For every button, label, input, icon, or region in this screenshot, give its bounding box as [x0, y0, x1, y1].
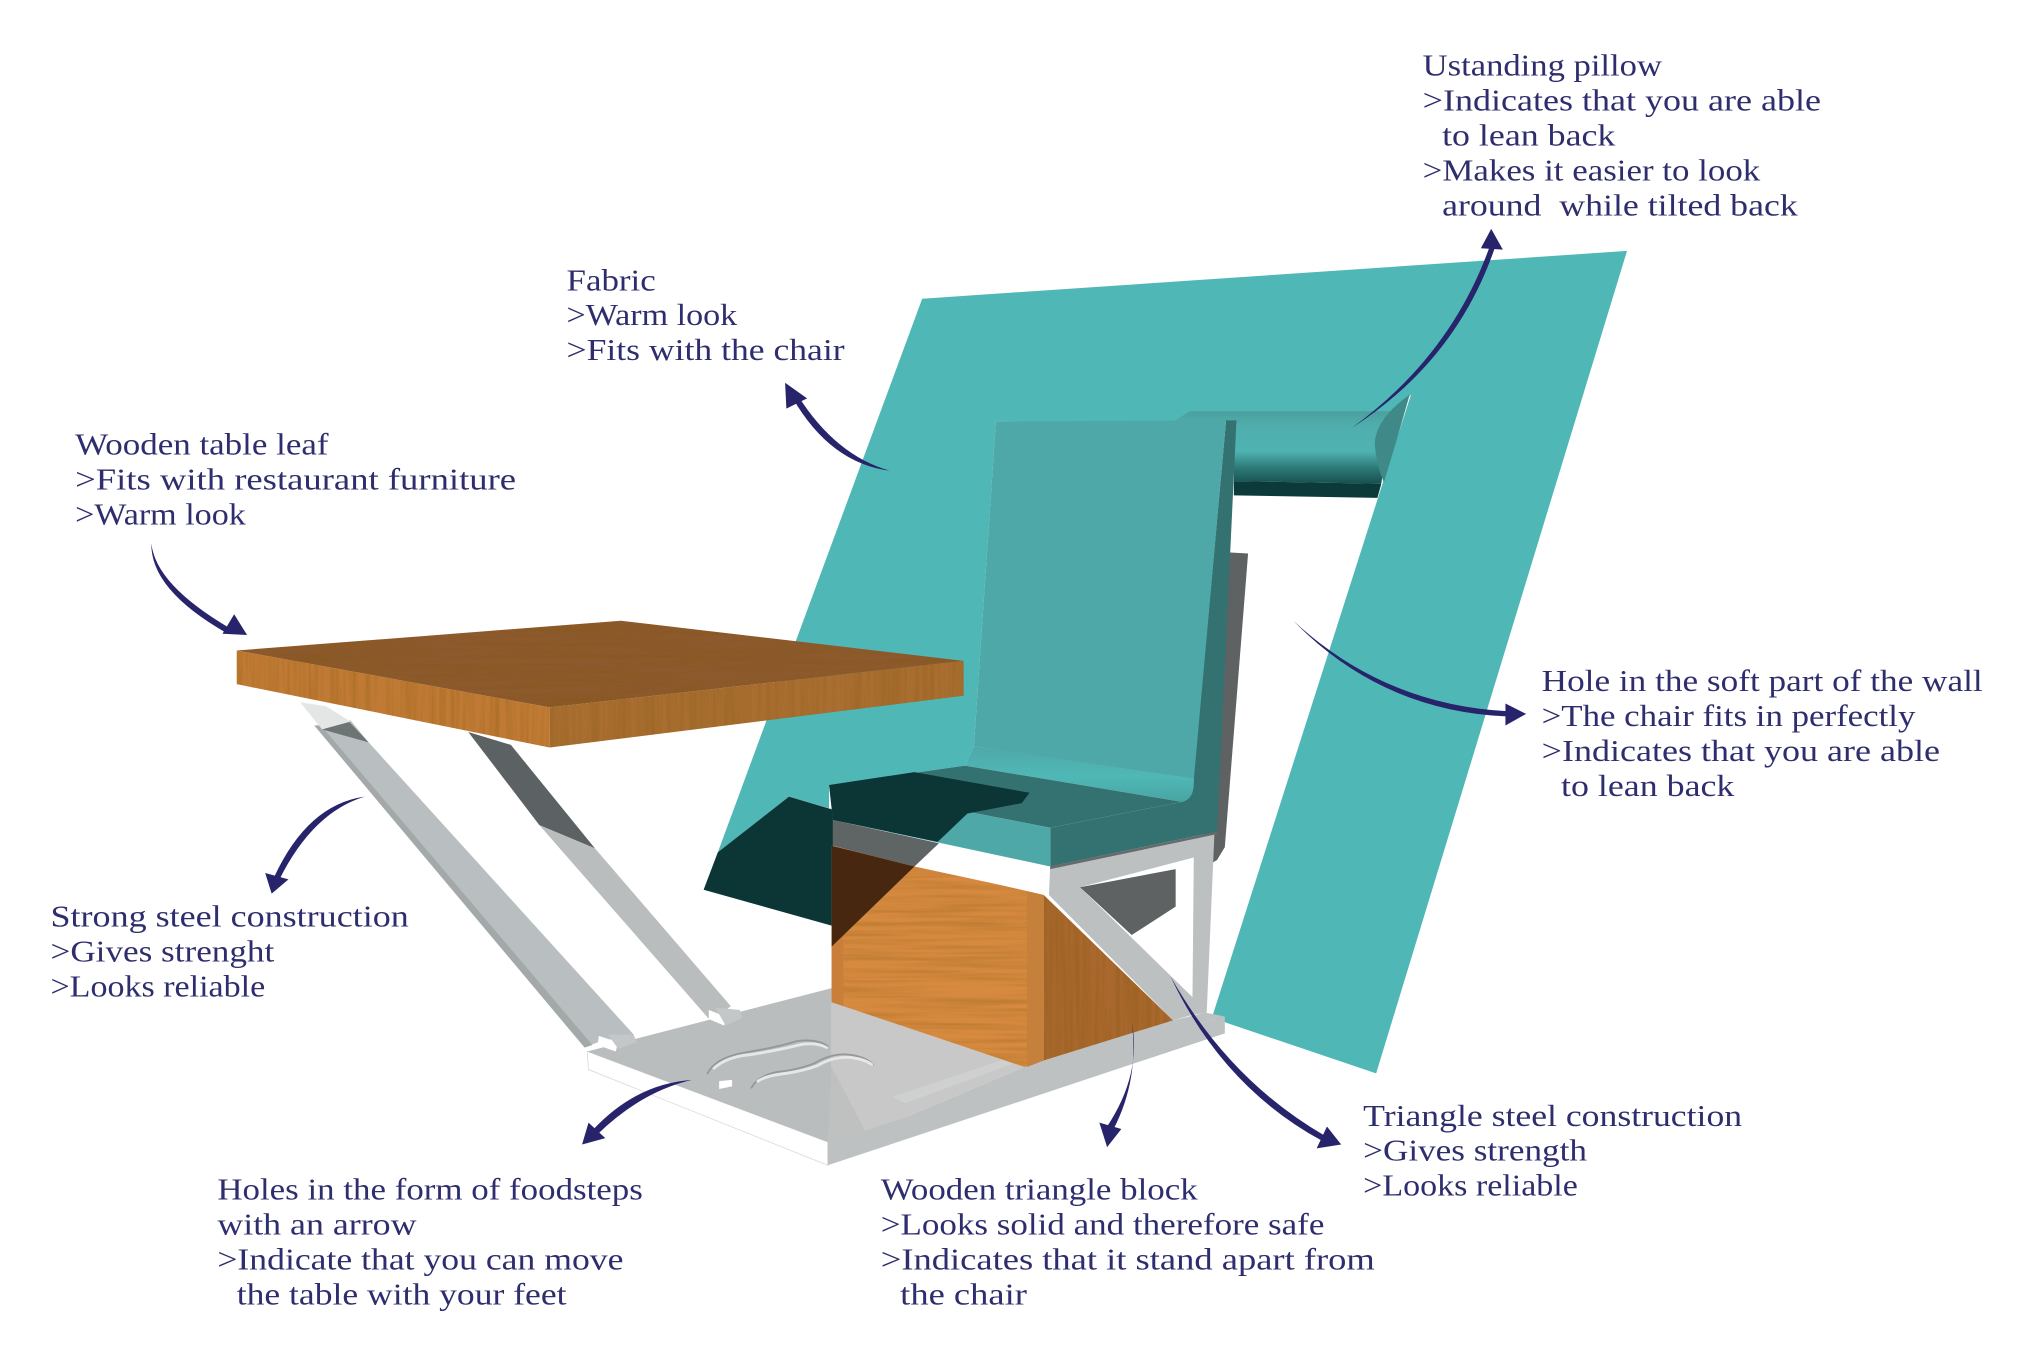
text: wooden triangle block: the chair: [900, 1276, 1028, 1311]
text: wooden table leaf: Wooden table leaf: [75, 427, 329, 462]
text: triangle steel construction: >Gives strength: [1363, 1133, 1587, 1168]
text: fabric: >Warm look: [567, 297, 738, 332]
text: wooden triangle block: Wooden triangle block: [881, 1172, 1198, 1207]
text: hole in the wall: to lean back: [1561, 768, 1735, 803]
wall panel: fabric wall with hole: [718, 251, 1627, 1073]
text: fabric: >Fits with the chair: [567, 332, 845, 367]
text: ustanding pillow: >Indicates that you are able: [1423, 83, 1821, 118]
text: fabric: Fabric: [567, 262, 656, 297]
wooden table leaf: [237, 621, 964, 748]
text: ustanding pillow: to lean back: [1442, 117, 1616, 152]
text: wooden triangle block: >Indicates that it stand apart from: [881, 1241, 1375, 1276]
arrow: wooden block: [1099, 1022, 1134, 1147]
table legs: [300, 702, 742, 1051]
arrow: steel construction: [265, 797, 365, 894]
text: ustanding pillow: Ustanding pillow: [1423, 48, 1663, 83]
text: strong steel construction: >Looks reliable: [51, 968, 265, 1003]
arrow: table leaf: [151, 543, 247, 635]
footstep holes: [707, 1040, 873, 1088]
arrow: pillow: [1352, 229, 1503, 428]
arrow: footstep holes: [582, 1080, 692, 1145]
seat underside strip: [833, 820, 1050, 895]
leg front: [314, 720, 634, 1048]
text: wooden triangle block: [881, 1172, 1375, 1311]
pillow: [1173, 394, 1410, 498]
text: wooden table leaf: >Fits with restaurant furniture: [75, 462, 516, 497]
text: hole in the wall: Hole in the soft part of the wall: [1542, 663, 1983, 698]
text: footstep holes: the table with your feet: [237, 1276, 567, 1311]
small white marker: [719, 1080, 732, 1089]
text: hole in the wall: >Indicates that you are able: [1542, 733, 1940, 768]
text: ustanding pillow: >Makes it easier to look: [1423, 152, 1761, 187]
text: wooden table leaf: >Warm look: [75, 496, 246, 531]
text: wooden table leaf: [75, 427, 516, 531]
text: ustanding pillow: around while tilted back: [1442, 187, 1798, 222]
text: ustanding pillow: [1423, 48, 1821, 222]
text: wooden triangle block: >Looks solid and therefore safe: [881, 1206, 1324, 1241]
arrow: fabric: [785, 383, 890, 471]
text: strong steel construction: [51, 899, 409, 1003]
text: strong steel construction: >Gives strenght: [51, 934, 275, 969]
chair seat: [829, 766, 1217, 869]
wooden triangle block: [832, 846, 1173, 1067]
text: triangle steel construction: >Looks reliable: [1363, 1168, 1578, 1203]
text: footstep holes: with an arrow: [217, 1206, 417, 1241]
text: hole in the wall: [1542, 663, 1983, 803]
text: hole in the wall: >The chair fits in perfectly: [1542, 698, 1916, 733]
triangle steel frame: [1049, 833, 1214, 1020]
text: fabric: [567, 262, 845, 367]
text: triangle steel construction: [1363, 1098, 1743, 1203]
text: strong steel construction: Strong steel construction: [51, 899, 409, 934]
wall shadow: [704, 797, 833, 926]
arrow: hole in wall: [1293, 621, 1526, 726]
arrow: triangle steel: [1170, 976, 1341, 1148]
text: footstep holes: Holes in the form of foodsteps: [217, 1172, 643, 1207]
text: footstep holes: [217, 1172, 643, 1311]
text: triangle steel construction: Triangle steel construction: [1363, 1098, 1743, 1133]
base plate: [587, 988, 1225, 1165]
grey rear chair panel: [1203, 552, 1248, 864]
leg rear: [468, 732, 595, 848]
chair backrest: [965, 420, 1236, 866]
text: footstep holes: >Indicate that you can move: [217, 1241, 623, 1276]
